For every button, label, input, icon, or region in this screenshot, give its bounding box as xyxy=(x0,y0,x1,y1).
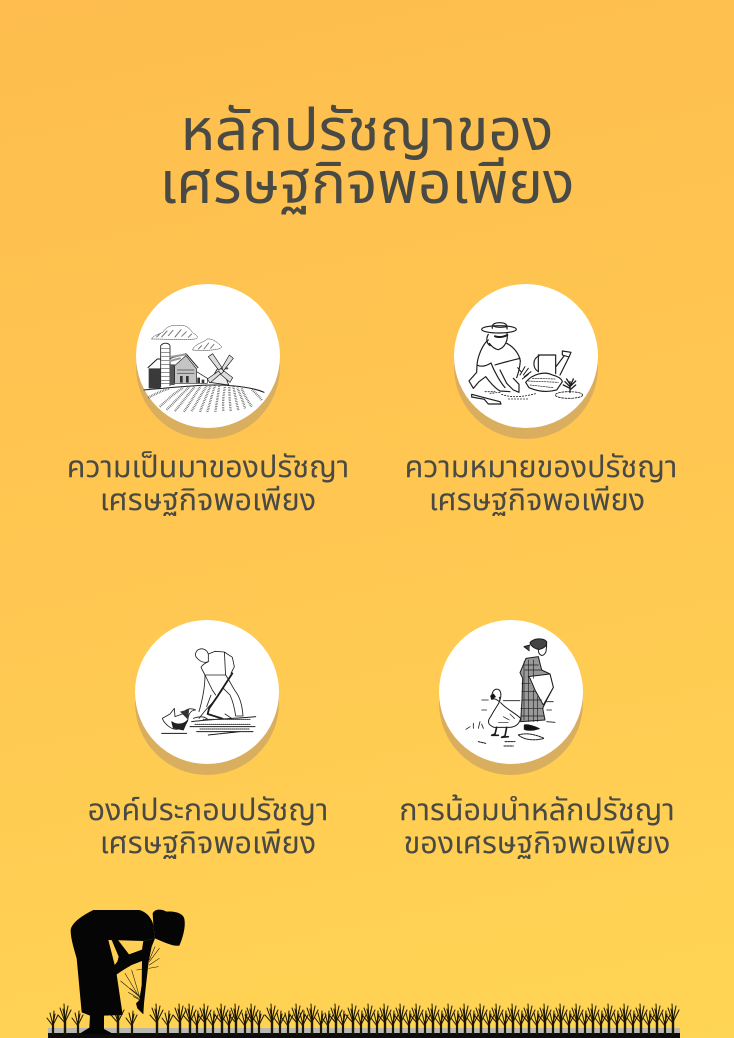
label: meaning: ความหมายของปรัชญา xyxy=(405,450,677,484)
silhouette: farmer planting rice xyxy=(71,910,185,1034)
title: หลักปรัชญาของ xyxy=(181,98,553,163)
label: components: เศรษฐกิจพอเพียง xyxy=(100,826,316,860)
label: meaning xyxy=(405,450,677,517)
title: เศรษฐกิจพอเพียง xyxy=(160,151,574,216)
label: history xyxy=(67,450,349,517)
label: components: องค์ประกอบปรัชญา xyxy=(88,793,328,827)
label: applying: ของเศรษฐกิจพอเพียง xyxy=(404,826,670,860)
panel: components of the philosophy xyxy=(88,620,328,860)
rice field ground with seedlings xyxy=(47,1004,680,1038)
icon: girl with goose xyxy=(439,620,583,775)
label: history: เศรษฐกิจพอเพียง xyxy=(100,483,316,517)
label: applying xyxy=(399,793,675,860)
title xyxy=(160,98,574,216)
panel: history of the philosophy xyxy=(67,284,349,517)
label: meaning: เศรษฐกิจพอเพียง xyxy=(429,483,645,517)
label: components xyxy=(88,793,328,860)
label: applying: การน้อมนำหลักปรัชญา xyxy=(399,793,675,827)
label: history: ความเป็นมาของปรัชญา xyxy=(67,450,349,484)
panel: meaning of the philosophy xyxy=(405,284,677,517)
icon: gardener with watering can xyxy=(454,284,598,439)
panel: applying the philosophy xyxy=(399,620,675,860)
icon: farm with barn and windmill xyxy=(136,284,280,439)
icon: man hoeing with chicken xyxy=(135,620,279,775)
